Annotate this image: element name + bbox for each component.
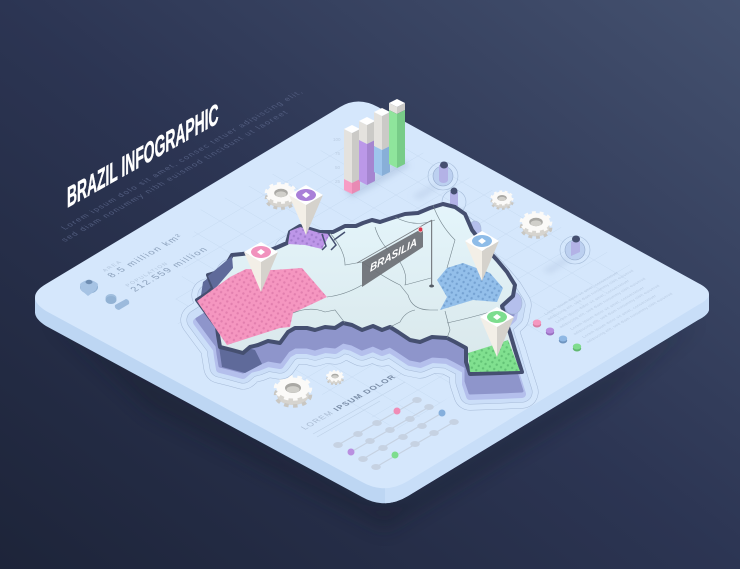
legend dots and text — [533, 269, 674, 352]
banner label: BRASILIA — [370, 236, 417, 275]
intro text: sed diam nonummy nibh euismod tincidunt ut laoreet — [59, 109, 291, 243]
icon: person — [106, 294, 129, 310]
gear: top left — [266, 184, 296, 208]
grid lines — [170, 125, 640, 430]
marker: upper middle — [442, 188, 466, 214]
timeline dot: pink — [394, 408, 400, 414]
legend dot: green — [573, 344, 581, 352]
legend text: adipiscing elit, sed diam nonummy nibh euismod — [572, 284, 661, 336]
map extrusion — [197, 223, 522, 393]
region: purple north — [288, 227, 330, 249]
intro text: Lorem ipsum dolo sit amet, consec tetuer adipiscing elit, — [59, 89, 305, 231]
map of Brazil — [197, 204, 522, 396]
banner — [362, 228, 423, 287]
gear: small bottom — [327, 371, 343, 384]
legend dot: blue — [559, 336, 567, 344]
dark inlet: west — [208, 256, 233, 290]
gear: large bottom — [276, 377, 310, 406]
region: pink west — [197, 268, 327, 345]
gear: small right — [492, 191, 512, 209]
river delta — [322, 232, 345, 250]
gear: medium right — [521, 213, 551, 237]
flag: Brasilia — [357, 220, 434, 288]
marker: upper left — [412, 162, 458, 200]
icon: location — [80, 280, 98, 296]
dark extrusion: west — [200, 262, 262, 373]
region: blue east — [437, 263, 503, 310]
capital marker — [418, 227, 423, 232]
map land — [197, 204, 522, 374]
legend text: adipiscing elit, sed diam nonummy nibh euismod — [585, 292, 674, 344]
axis labels: 100 — [333, 137, 341, 142]
legend text: adipiscing elit, sed diam nonummy nibh euismod — [546, 269, 635, 321]
area and population stats: 212.559 million — [128, 246, 210, 294]
axis labels: 25 — [335, 179, 341, 184]
legend text — [543, 269, 674, 344]
title: BRAZIL INFOGRAPHIC — [67, 98, 219, 215]
axis labels: 50 — [335, 165, 341, 170]
pin: purple — [289, 185, 323, 235]
bottom heading: LOREM IPSUM DOLOR — [299, 374, 398, 431]
timeline chart — [333, 397, 459, 470]
area and population stats: AREA — [102, 260, 123, 273]
legend text: Lorem ipsum dolor sit amet, consectetuer — [554, 279, 631, 324]
platform — [35, 102, 709, 530]
pin: green — [480, 307, 514, 357]
bar chart — [333, 99, 410, 198]
area and population stats: POPULATION — [125, 262, 170, 288]
timeline dot: blue — [438, 410, 446, 416]
area and population stats: 8.5 million km² — [105, 233, 186, 280]
legend text: Lorem ipsum dolor sit amet, consectetuer — [543, 271, 620, 316]
timeline dot: purple — [348, 448, 354, 456]
coast rings — [469, 221, 522, 314]
legend text: Lorem ipsum dolor sit amet, consectetuer — [581, 294, 658, 339]
axis labels — [333, 137, 341, 184]
legend dot: pink — [533, 320, 541, 328]
marker: right — [542, 236, 590, 274]
flag pole — [431, 220, 432, 286]
area and population stats — [102, 233, 210, 294]
legend text: Lorem ipsum dolor sit amet, consectetuer — [569, 286, 646, 331]
legend dot: purple — [546, 328, 554, 336]
gears — [266, 184, 551, 406]
pin: blue — [465, 231, 499, 281]
region: green south — [468, 340, 520, 372]
map contour halos — [197, 224, 522, 396]
state borders — [293, 205, 490, 338]
axis labels: 75 — [335, 151, 341, 156]
legend text: adipiscing elit, sed diam nonummy nibh euismod — [558, 277, 647, 329]
timeline dot: green — [392, 452, 398, 458]
pin: pink — [244, 242, 278, 292]
